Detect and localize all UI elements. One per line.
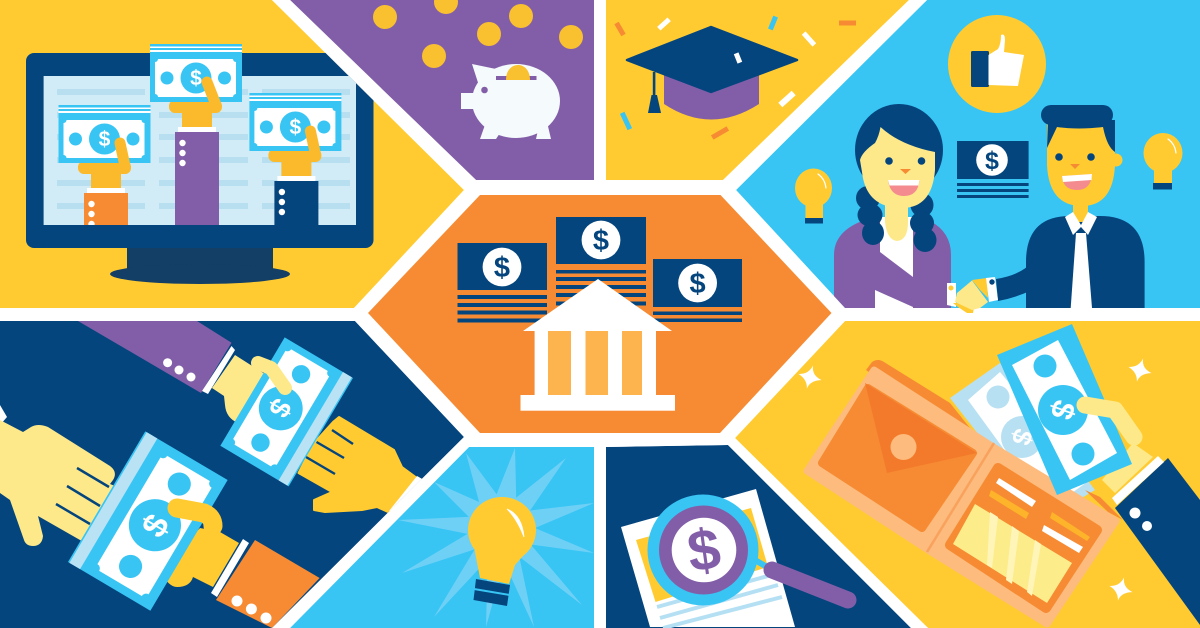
panel: graduation — [606, 0, 909, 180]
panel: savings piggy bank — [290, 0, 594, 180]
icon: stack of bills middle: $ — [593, 225, 609, 257]
thumb over lower bill — [177, 508, 213, 526]
man — [996, 105, 1145, 308]
money bill behind wallet: $ — [1005, 425, 1039, 449]
icon: thumbs up — [948, 15, 1046, 113]
hand with bill: navy sleeve — [249, 93, 342, 225]
handshake hands — [947, 277, 998, 313]
yellow hand with fingers — [298, 417, 424, 514]
hand with bill: purple sleeve — [150, 44, 242, 232]
icon: magnifying glass — [648, 494, 848, 606]
money bill in hand — [997, 324, 1132, 495]
icon: graduation cap — [627, 27, 797, 120]
icon: stack of bills right: $ — [690, 268, 706, 300]
document — [621, 489, 795, 628]
icon: money bill: $ — [985, 147, 999, 175]
pale hand left — [0, 405, 125, 546]
panel: document under magnifying glass — [606, 445, 911, 628]
hand with bill: orange sleeve: $ — [99, 128, 111, 151]
panel: online banking monitor — [0, 0, 464, 308]
thumb on bill — [1085, 405, 1134, 437]
hand with bill: purple sleeve: $ — [190, 67, 202, 90]
woman — [834, 104, 951, 308]
money bill lower — [68, 431, 228, 611]
money bill behind wallet — [950, 363, 1095, 498]
panel: handshake between two people — [736, 0, 1200, 308]
panel: lightbulb idea — [290, 447, 594, 628]
icon: stack of bills left — [458, 243, 547, 322]
thumb over upper bill — [258, 363, 285, 388]
icon: magnifying glass: $ — [684, 516, 725, 585]
orange sleeve lower hand — [160, 528, 320, 628]
icon: falling coins — [373, 0, 583, 68]
money bill upper: $ — [262, 393, 298, 423]
icon: piggy bank — [461, 64, 560, 139]
icon: stack of bills right — [653, 259, 742, 322]
panel: central bank hexagon — [368, 195, 832, 433]
sleeve with cuff — [1102, 443, 1200, 625]
panel: money exchange between hands — [0, 321, 464, 628]
icon: lightbulb — [468, 497, 536, 606]
icon: monitor — [26, 53, 374, 284]
icon: lightbulb right — [1144, 133, 1182, 190]
hand with bill: navy sleeve: $ — [290, 116, 302, 139]
icon: stack of bills left: $ — [494, 252, 510, 284]
icon: money bill — [957, 141, 1029, 198]
icon: wallet — [807, 360, 1123, 624]
sunburst rays — [398, 448, 594, 627]
icon: stack of bills middle — [556, 217, 646, 306]
confetti — [614, 16, 856, 140]
purple sleeve top hand — [78, 321, 268, 428]
money bill in hand: $ — [1043, 395, 1083, 425]
icon: bank building — [520, 279, 675, 411]
money bill lower: $ — [135, 508, 177, 544]
sparkle stars — [795, 355, 1155, 604]
money bill upper — [220, 337, 353, 486]
icon: lightbulb left — [795, 168, 832, 224]
panel: wallet with cash — [735, 321, 1200, 628]
hand with bill: orange sleeve — [58, 105, 150, 225]
